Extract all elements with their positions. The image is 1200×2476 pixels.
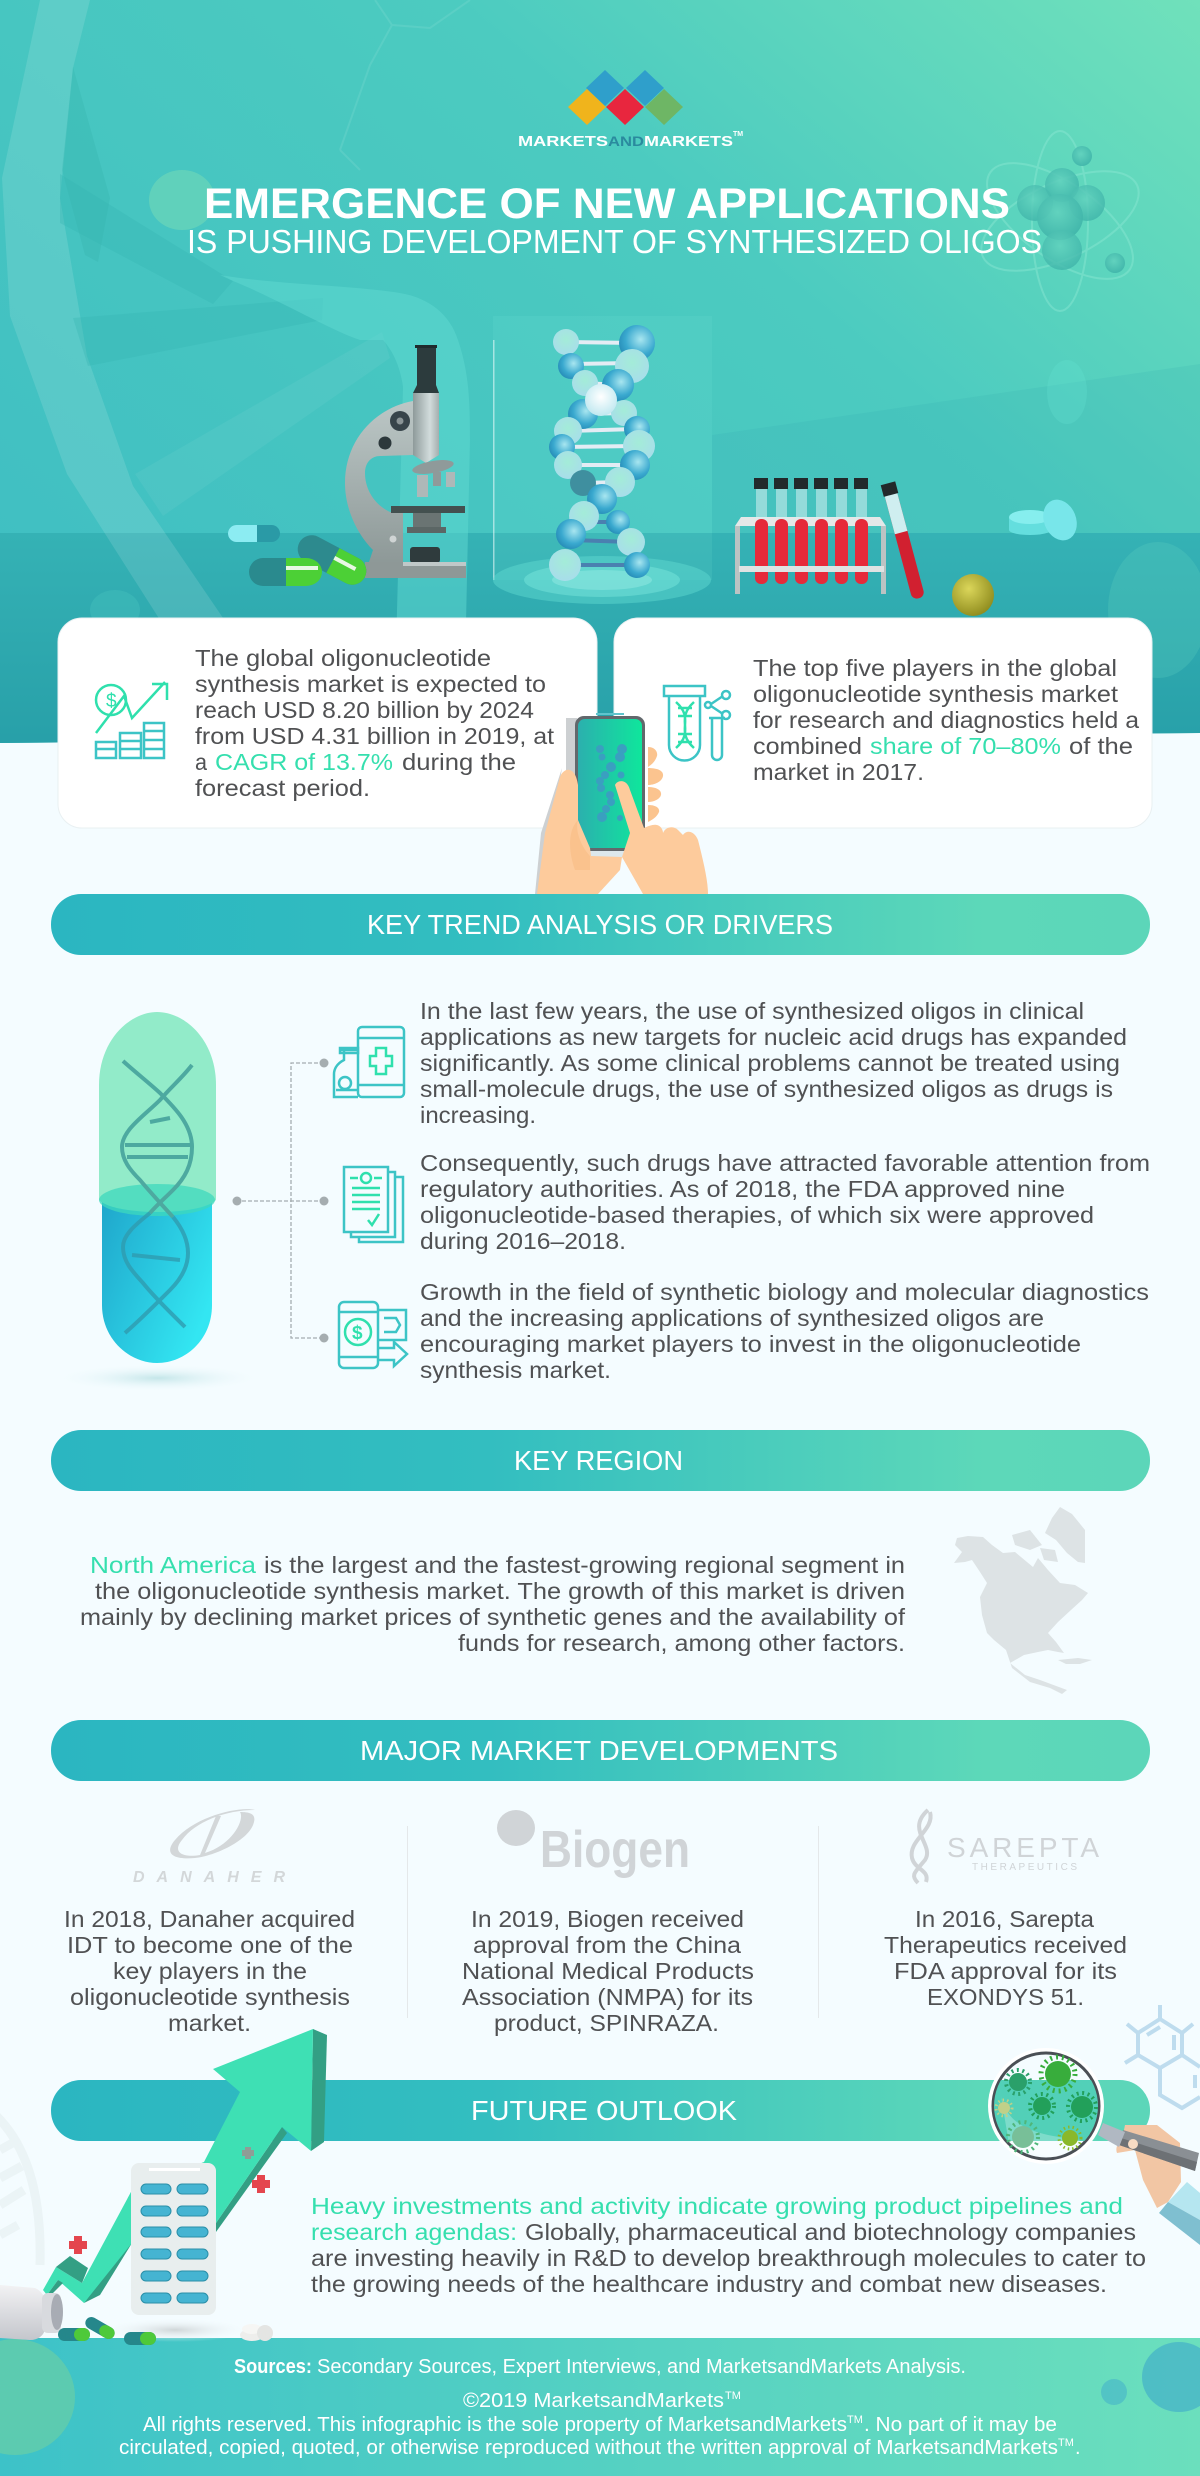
title: EMERGENCE OF NEW APPLICATIONS [204,180,1010,228]
panel: Danaher [64,1809,355,2036]
footer [0,2338,1200,2476]
connector lines [232,1058,328,1342]
text: future outlook: are investing heavily in R&D to develop breakthrough molecules to cater to [311,2245,1146,2271]
text: top players: of the [1069,733,1133,759]
heading: key trends: KEY TREND ANALYSIS OR DRIVERS [367,909,833,940]
text: copyright: ©2019 MarketsandMarkets [463,2390,724,2412]
text: North America: is the largest and the fastest-growing regional segment in [264,1552,905,1578]
text: clinical applications: small-molecule drugs, the use of synthesized oligos as drugs is [420,1076,1113,1102]
text: top players: oligonucleotide synthesis market [753,681,1119,707]
text: copyright: . [1075,2437,1081,2459]
text: Danaher acquisition: market. [168,2010,251,2036]
text: top players: The top five players in the global [753,655,1117,681]
text: regulatory attention: oligonucleotide-based therapies, of which six were approved [420,1202,1094,1228]
text: copyright: TM [725,2390,741,2402]
text: regulatory attention: Consequently, such drugs have attracted favorable attention from [420,1150,1150,1176]
text: Danaher acquisition [64,1906,355,2036]
text: Biogen approval: Association (NMPA) for its [462,1984,753,2010]
logo: MarketsandMarkets: MARKETS [644,133,733,150]
text: top players: combined [753,733,862,759]
text: Biogen approval: product, SPINRAZA. [494,2010,719,2036]
text: future outlook [311,2193,1146,2297]
logo: Biogen: Biogen [540,1821,690,1879]
text: market size: forecast period. [195,775,370,801]
text: market size: from USD 4.31 billion in 2019, at [195,723,555,749]
heading: future outlook [51,2080,1150,2141]
text: regulatory attention: regulatory authorities. As of 2018, the FDA approved nine [420,1176,1065,1202]
text: top players: share of 70–80% [870,733,1061,759]
icon: atom [967,131,1153,311]
text: regulatory attention: during 2016–2018. [420,1228,626,1254]
text: clinical applications: In the last few years, the use of synthesized oligos in clinical [420,998,1084,1024]
icon: mobile payment: $ [352,1323,363,1344]
logo: Sarepta [912,1810,1099,1883]
icon: growth chart: $ [106,691,117,712]
text: market size [195,645,555,801]
logo: Danaher: DANAHER [133,1869,285,1886]
text: copyright: . No part of it may be [864,2414,1057,2436]
text: Biogen approval: National Medical Products [462,1958,754,1984]
glass cylinder with DNA model [493,316,712,604]
heading: major market developments: MAJOR MARKET DEVELOPMENTS [360,1735,838,1766]
text: Biogen approval: In 2019, Biogen received [471,1906,744,1932]
text: future outlook: research agendas: [311,2219,517,2245]
text: clinical applications: applications as new targets for nucleic acid drugs has expanded [420,1024,1127,1050]
text: copyright: TM [847,2414,863,2426]
text: sources: Sources: [234,2356,312,2378]
icon: spilled bottle and pills [0,2285,273,2345]
text: market size: reach USD 8.20 billion by 2024 [195,697,534,723]
text: clinical applications: significantly. As some clinical problems cannot be treated using [420,1050,1120,1076]
panel: Biogen [462,1810,754,2036]
heading: major market developments [51,1720,1150,1781]
text: market size: The global oligonucleotide [195,645,491,671]
icon: mobile health [334,1027,404,1097]
title [187,180,1042,260]
text: Danaher acquisition: In 2018, Danaher acquired [64,1906,355,1932]
icon: hands holding phone [535,713,708,894]
icon: blister pack [100,2163,250,2342]
text: Danaher acquisition: key players in the [113,1958,307,1984]
text: Sarepta approval [884,1906,1127,2010]
text: copyright: circulated, copied, quoted, or otherwise reproduced without the written approval of MarketsandMarkets [119,2437,1058,2459]
panel: market size card [58,618,597,828]
icon: growth chart [96,682,167,758]
text: North America: North America [90,1552,256,1578]
text: sources: Secondary Sources, Expert Interviews, and MarketsandMarkets Analysis. [317,2356,966,2378]
logo: Sarepta: SAREPTA [947,1832,1099,1863]
text: market size: synthesis market is expected to [195,671,546,697]
heading: key trends [51,894,1150,955]
icon: test tube with DNA [664,686,730,760]
icon: mobile payment [339,1302,407,1368]
text: clinical applications: increasing. [420,1102,536,1128]
text: future outlook: Globally, pharmaceutical and biotechnology companies [525,2219,1136,2245]
text: clinical applications [420,998,1127,1128]
map: North America [954,1507,1092,1694]
text: future outlook: the growing needs of the healthcare industry and combat new diseases. [311,2271,1107,2297]
text: Biogen approval: approval from the China [473,1932,741,1958]
panel: top players card [614,618,1152,828]
divider [407,1826,408,2018]
logo: Sarepta: THERAPEUTICS [972,1862,1077,1873]
text: market size: during the [402,749,516,775]
text: top players: for research and diagnostics held a [753,707,1139,733]
icon: molecule outline [1125,2005,1200,2108]
text: North America: funds for research, among other factors. [458,1630,905,1656]
logo: MarketsandMarkets: MARKETS [518,133,608,150]
icon: approval document [344,1167,403,1242]
text: Danaher acquisition: oligonucleotide synthesis [70,1984,350,2010]
text: Sarepta approval: EXONDYS 51. [927,1984,1084,2010]
text: Biogen approval [462,1906,754,2036]
text: Sarepta approval: Therapeutics received [884,1932,1127,1958]
icon: capsules left [228,525,371,590]
text: future outlook: Heavy investments and activity indicate growing product pipelines and [311,2193,1123,2219]
text: regulatory attention [420,1150,1150,1254]
icon: yellow ball [952,574,994,616]
icon: rising arrow [43,2029,327,2303]
icon: plus signs [69,2147,270,2254]
text: North America: the oligonucleotide synthesis market. The growth of this market is driven [95,1578,905,1604]
text: market investment [420,1279,1149,1383]
text: Sarepta approval: FDA approval for its [894,1958,1117,1984]
text: market investment: encouraging market players to invest in the oligonucleotide [420,1331,1081,1357]
faint DNA lower-left [0,2110,40,2265]
divider [818,1826,819,2018]
text: top players [753,655,1139,785]
heading: key region: KEY REGION [514,1445,683,1476]
logo: MarketsandMarkets: AND [608,133,644,149]
text: market investment: and the increasing applications of synthesized oligos are [420,1305,1044,1331]
text: market size: a [195,749,207,775]
illustration: DNA capsule [53,1012,263,1392]
text: Sarepta approval: In 2016, Sarepta [915,1906,1094,1932]
logo: Danaher [133,1809,285,1886]
text: copyright: All rights reserved. This infographic is the sole property of MarketsandMarkets [143,2414,847,2436]
logo: MarketsandMarkets: TM [733,131,743,138]
icon: microscope [345,345,466,578]
text: market investment: synthesis market. [420,1357,611,1383]
heading: key region [51,1430,1150,1491]
title: IS PUSHING DEVELOPMENT OF SYNTHESIZED OLIGOS [187,223,1042,260]
text: North America [80,1552,906,1656]
logo: MarketsandMarkets [518,70,743,150]
text: market size: CAGR of 13.7% [215,749,393,775]
text: copyright: TM [1058,2437,1074,2449]
logo: Biogen [497,1810,690,1879]
text: North America: mainly by declining market prices of synthetic genes and the availability of [80,1604,906,1630]
heading: future outlook: FUTURE OUTLOOK [471,2095,737,2126]
icon: magnifier with hand [980,2048,1200,2245]
text: Danaher acquisition: IDT to become one of the [67,1932,353,1958]
hero banner background [0,0,1200,760]
text: copyright [119,2390,1081,2459]
text: market investment: Growth in the field of synthetic biology and molecular diagnostics [420,1279,1149,1305]
icon: tablets right [1009,495,1083,545]
icon: test tube rack [735,478,926,600]
text: top players: market in 2017. [753,759,924,785]
panel: Sarepta [884,1810,1127,2010]
